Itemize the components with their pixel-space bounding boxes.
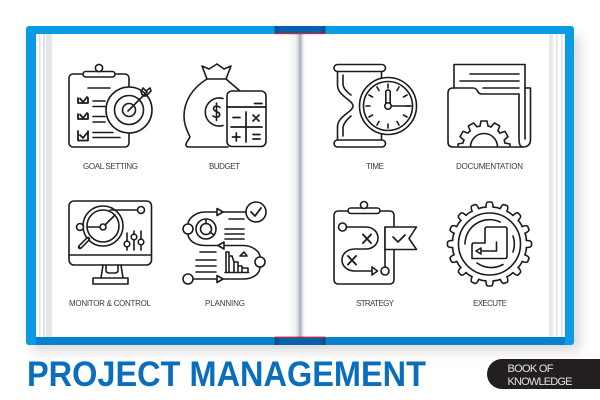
badge: book of knowledge: KNOWLEDGE xyxy=(508,376,572,388)
icon: strategy xyxy=(334,202,416,284)
label: strategy: STRATEGY xyxy=(356,299,395,308)
book shadow xyxy=(32,36,580,351)
icon: budget xyxy=(184,64,266,147)
label: documentation: DOCUMENTATION xyxy=(456,162,523,171)
spine band top xyxy=(274,26,326,34)
cover bottom edge xyxy=(36,337,565,345)
badge: book of knowledge: BOOK OF xyxy=(508,363,554,375)
icon: goal setting xyxy=(69,64,152,147)
label: goal setting: GOAL SETTING xyxy=(83,162,138,171)
right page gutter xyxy=(300,34,305,337)
right page edges xyxy=(549,34,562,337)
icon: documentation xyxy=(448,64,530,160)
icon: planning xyxy=(183,202,266,284)
badge: book of knowledge xyxy=(487,359,600,389)
icon: time xyxy=(334,64,416,147)
title: PROJECT MANAGEMENT xyxy=(27,355,426,394)
book xyxy=(26,26,574,345)
left page edges xyxy=(39,34,52,337)
icon: execute xyxy=(447,201,532,287)
red ribbon top xyxy=(274,33,326,34)
page block xyxy=(36,34,565,337)
left page gutter xyxy=(288,34,300,337)
label: time: TIME xyxy=(366,162,384,171)
spine band bottom xyxy=(274,337,326,345)
label: planning: PLANNING xyxy=(205,299,245,308)
label: execute: EXECUTE xyxy=(473,299,507,308)
label: monitor and control: MONITOR & CONTROL xyxy=(69,299,152,308)
icon: monitor and control xyxy=(69,201,152,284)
book cover xyxy=(26,26,574,345)
label: budget: BUDGET xyxy=(209,162,240,171)
red ribbon bottom xyxy=(274,337,326,338)
